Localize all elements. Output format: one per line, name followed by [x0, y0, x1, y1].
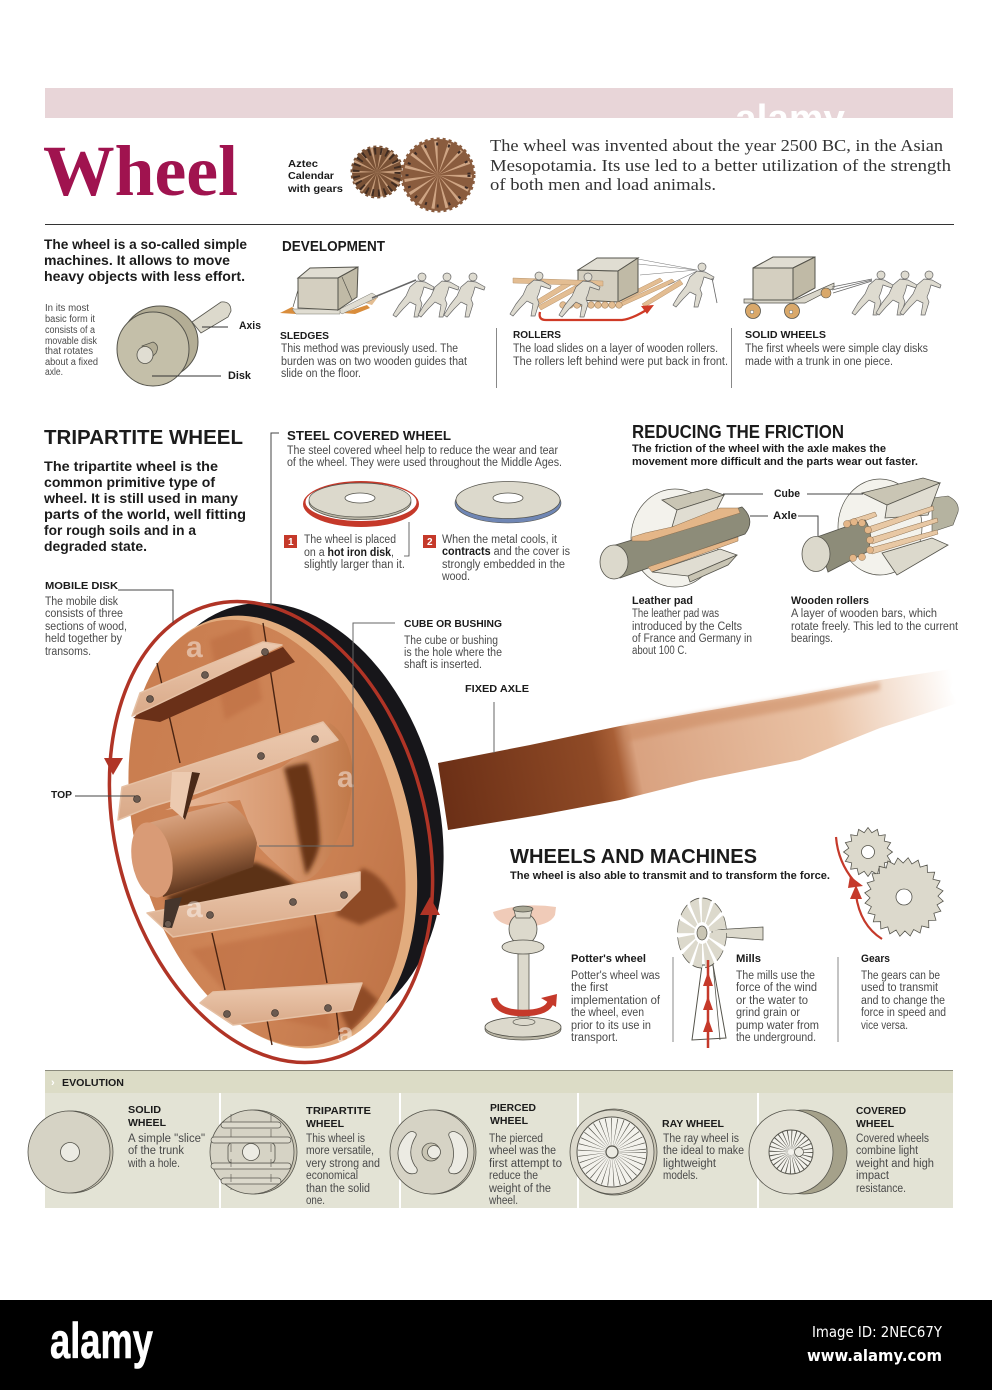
- evolution: tripartite wheel icon: [210, 1110, 297, 1194]
- intro text: Mesopotamia. Its use led to a better utilization of the strength: [490, 156, 952, 175]
- tripartite paragraph: [43, 458, 246, 554]
- text: sledges: SLEDGES: [280, 330, 329, 342]
- text: sledges: [280, 330, 468, 380]
- aztec calendar label: with gears: [287, 183, 343, 195]
- wheel: hub shadow stripe: [284, 763, 320, 875]
- leader: cube or bushing: [259, 623, 395, 846]
- text: gears: used to transmit: [861, 982, 939, 994]
- evolution: tripartite wheel text: WHEEL: [306, 1118, 345, 1130]
- illustration: sledges: [280, 267, 485, 317]
- white separators: [219, 1093, 759, 1208]
- text: wooden rollers: A layer of wooden bars, which: [791, 608, 937, 620]
- text: sledges: This method was previously used. The: [281, 343, 458, 355]
- text: potter's wheel: transport.: [571, 1032, 618, 1044]
- evolution: covered wheel text: [855, 1105, 934, 1195]
- wheel: bevelled edge: [83, 583, 463, 1081]
- evolution: tripartite wheel text: This wheel is: [306, 1133, 365, 1145]
- step 1: [284, 534, 405, 571]
- text: mills: force of the wind: [736, 982, 817, 994]
- text: gears: vice versa.: [861, 1020, 908, 1032]
- text: leather pad: about 100 C.: [632, 645, 687, 657]
- fixed axle label: FIXED AXLE: [465, 683, 529, 695]
- leader: steel covered wheel: [271, 433, 279, 606]
- top label: TOP: [51, 789, 72, 801]
- basic form description: that rotates: [45, 346, 93, 357]
- wheel: axle stub: [148, 802, 257, 897]
- footer bar: alamy: [50, 1313, 153, 1369]
- icon: gears: [836, 828, 947, 940]
- evolution: covered wheel icon: [749, 1110, 847, 1194]
- reducing the friction heading: [632, 422, 918, 468]
- text: potter's wheel: Potter's wheel: [571, 953, 646, 965]
- mobile disk text: consists of three: [45, 608, 123, 620]
- text: potter's wheel: the wheel, even: [571, 1007, 644, 1019]
- text: rollers: The rollers left behind were put back in front.: [513, 356, 728, 368]
- evolution: tripartite wheel text: more versatile,: [306, 1145, 374, 1157]
- diagram: disk and axis: Disk: [228, 370, 252, 382]
- icon: aztec calendar gears: [352, 139, 474, 211]
- text: potter's wheel: prior to its use in: [571, 1020, 651, 1032]
- evolution: ray wheel text: lightweight: [663, 1158, 717, 1170]
- text: wooden rollers: [791, 595, 959, 645]
- top colour band: alamy: [735, 98, 845, 140]
- evolution: ray wheel text: The ray wheel is: [663, 1133, 739, 1145]
- evolution: pierced wheel text: reduce the: [489, 1170, 538, 1182]
- reducing the friction heading: The friction of the wheel with the axle makes the: [632, 443, 886, 455]
- diagram: wooden rollers bearing: [802, 478, 958, 575]
- step 2: strongly embedded in the: [442, 559, 565, 571]
- steel covered wheel heading and text: STEEL COVERED WHEEL: [287, 429, 451, 443]
- wheel: transom shadows: [335, 868, 398, 1032]
- footer bar: [0, 1300, 992, 1390]
- footer bar: www.alamy.com: [807, 1346, 942, 1365]
- steel covered wheel heading and text: The steel covered wheel help to reduce the wear and tear: [287, 445, 558, 457]
- evolution: ray wheel text: models.: [663, 1170, 698, 1182]
- evolution: covered wheel text: impact: [856, 1170, 890, 1182]
- wheel: stub end cap: [126, 819, 178, 901]
- evolution: covered wheel text: combine light: [856, 1145, 919, 1157]
- evolution header strip: ›: [51, 1077, 55, 1089]
- step 2: When the metal cools, it: [442, 534, 558, 546]
- text: potter's wheel: the first: [571, 982, 609, 994]
- step 1: 1: [288, 537, 294, 548]
- wheel: shadow under hub: [165, 862, 296, 908]
- text: rollers: The load slides on a layer of wooden rollers.: [513, 343, 718, 355]
- text: potter's wheel: [571, 953, 661, 1044]
- tripartite paragraph: The tripartite wheel is the: [44, 458, 218, 474]
- icon: potter's wheel: [485, 905, 561, 1040]
- text: sledges: burden was on two wooden guides that: [281, 356, 468, 368]
- evolution: solid wheel text: WHEEL: [128, 1117, 167, 1129]
- top colour band: [45, 88, 953, 118]
- evolution: covered wheel text: Covered wheels: [856, 1133, 929, 1145]
- labels: cube and axle: [723, 488, 863, 536]
- evolution: covered wheel text: COVERED: [856, 1105, 906, 1117]
- text: leather pad: of France and Germany in: [632, 633, 752, 645]
- text: potter's wheel: Potter's wheel was: [571, 970, 660, 982]
- wheel: rotation arrows: [104, 758, 440, 915]
- basic form description: axle.: [45, 367, 63, 378]
- mobile disk text: sections of wood,: [45, 621, 127, 633]
- text: mills: grind grain or: [736, 1007, 800, 1019]
- evolution: ray wheel text: RAY WHEEL: [662, 1118, 725, 1130]
- evolution: pierced wheel text: wheel.: [488, 1195, 518, 1207]
- tripartite paragraph: parts of the world, well fitting: [44, 506, 246, 522]
- text: gears: [861, 953, 946, 1032]
- simple machine statement: machines. It allows to move: [44, 252, 230, 268]
- cube or bushing text: shaft is inserted.: [404, 659, 482, 671]
- wheel: red rotation path: [60, 565, 482, 1099]
- footer bar: Image ID: 2NEC67Y: [812, 1323, 943, 1341]
- text: gears: Gears: [861, 953, 890, 965]
- cube or bushing text: is the hole where the: [404, 647, 502, 659]
- text: mills: the underground.: [736, 1032, 816, 1044]
- tripartite paragraph: wheel. It is still used in many: [43, 490, 238, 506]
- basic form description: about a fixed: [45, 357, 98, 368]
- mobile disk text: held together by: [45, 633, 122, 645]
- cube or bushing text: The cube or bushing: [404, 635, 498, 647]
- heading: tripartite wheel: TRIPARTITE WHEEL: [44, 427, 243, 449]
- mobile disk text: MOBILE DISK: [45, 580, 118, 592]
- evolution: covered wheel text: resistance.: [856, 1183, 906, 1195]
- text: mills: Mills: [736, 953, 761, 965]
- evolution: solid wheel text: SOLID: [128, 1104, 161, 1116]
- labels: cube and axle: Cube: [774, 488, 800, 500]
- illustration: solid wheels: [744, 257, 941, 318]
- evolution: pierced wheel text: first attempt to: [489, 1158, 562, 1170]
- reducing the friction heading: REDUCING THE FRICTION: [632, 422, 844, 442]
- text: solid wheels: [745, 329, 928, 368]
- text: wooden rollers: rotate freely. This led to the current: [791, 621, 959, 633]
- wheels and machines heading: The wheel is also able to transmit and to transform the force.: [510, 870, 830, 882]
- panel: evolution: [28, 1070, 953, 1208]
- evolution: solid wheel icon: [28, 1111, 113, 1193]
- labels: cube and axle: Axle: [773, 510, 797, 522]
- evolution: tripartite wheel text: economical: [306, 1170, 358, 1182]
- tripartite paragraph: for rough soils and in a: [44, 522, 196, 538]
- evolution: pierced wheel icon: [390, 1110, 476, 1194]
- evolution background: [45, 1093, 953, 1208]
- aztec calendar label: Calendar: [288, 170, 334, 182]
- wheel: transom 1: [132, 642, 295, 722]
- evolution: pierced wheel text: WHEEL: [490, 1115, 529, 1127]
- text: mills: [736, 953, 819, 1044]
- evolution: solid wheel text: with a hole.: [127, 1158, 180, 1170]
- wheel: plank cracks: [157, 623, 340, 1045]
- diagram: leather pad bearing: [600, 489, 750, 587]
- evolution: pierced wheel text: The pierced: [489, 1133, 543, 1145]
- reducing the friction heading: movement more difficult and the parts wear out faster.: [632, 456, 918, 468]
- top label: [51, 789, 135, 801]
- fixed axle: [438, 668, 958, 830]
- simple machine statement: heavy objects with less effort.: [44, 268, 245, 284]
- evolution: pierced wheel text: PIERCED: [490, 1102, 536, 1114]
- wheel: brush shading: [190, 625, 330, 1030]
- evolution: pierced wheel text: wheel was the: [488, 1145, 556, 1157]
- step 2: contracts and the cover is: [442, 546, 570, 558]
- steel wheel disk: cooled cover: [455, 482, 561, 523]
- basic form description: [45, 303, 98, 378]
- wheel: lower wedge: [163, 897, 182, 928]
- basic form description: movable disk: [45, 336, 98, 347]
- steel wheel disk: hot ring: [303, 481, 419, 556]
- evolution header strip: EVOLUTION: [62, 1077, 124, 1089]
- evolution header strip: [45, 1070, 953, 1093]
- wheel: wooden face: [84, 589, 450, 1077]
- wheel: transom 4: [200, 983, 362, 1025]
- evolution: ray wheel text: [662, 1118, 744, 1182]
- text: mills: The mills use the: [736, 970, 815, 982]
- icon: windmill: [678, 898, 763, 1048]
- heading: development: DEVELOPMENT: [282, 239, 385, 255]
- text: leather pad: Leather pad: [632, 595, 693, 607]
- wheel: watermark letters: a: [337, 1017, 354, 1050]
- text: solid wheels: The first wheels were simple clay disks: [745, 343, 928, 355]
- intro text: The wheel was invented about the year 2500 BC, in the Asian: [490, 136, 944, 155]
- text: wooden rollers: bearings.: [791, 633, 833, 645]
- evolution: tripartite wheel text: than the solid: [306, 1183, 370, 1195]
- text: solid wheels: made with a trunk in one piece.: [745, 356, 893, 368]
- step 1: slightly larger than it.: [304, 559, 405, 571]
- title: Wheel: [43, 131, 238, 211]
- text: sledges: slide on the floor.: [281, 368, 361, 380]
- evolution: ray wheel text: the ideal to make: [663, 1145, 744, 1157]
- cube or bushing text: [404, 618, 502, 671]
- mobile disk text: [45, 580, 127, 658]
- text: wooden rollers: Wooden rollers: [791, 595, 869, 607]
- steel covered wheel heading and text: of the wheel. They were used throughout the Middle Ages.: [287, 457, 562, 469]
- fixed axle label: [465, 683, 529, 753]
- evolution: solid wheel text: A simple "slice": [128, 1133, 205, 1145]
- steel covered wheel heading and text: [287, 429, 562, 469]
- evolution: tripartite wheel text: one.: [306, 1195, 325, 1207]
- text: leather pad: introduced by the Celts: [632, 621, 742, 633]
- evolution: tripartite wheel text: very strong and: [306, 1158, 380, 1170]
- simple machine statement: [44, 236, 247, 284]
- text: rollers: [513, 329, 728, 368]
- wheels and machines heading: [510, 846, 830, 882]
- wheel: wedge: [170, 772, 200, 820]
- wheel: iron rim: [93, 568, 489, 1062]
- aztec calendar label: Aztec: [288, 158, 318, 170]
- tripartite paragraph: degraded state.: [44, 538, 147, 554]
- evolution: tripartite wheel text: [306, 1105, 380, 1207]
- wheel: hub block: [165, 723, 353, 881]
- evolution: ray wheel icon: [570, 1109, 657, 1195]
- step 2: [423, 534, 570, 583]
- step 1: The wheel is placed: [304, 534, 396, 546]
- diagram: disk and axis: [117, 302, 261, 386]
- wheel: transom 2: [118, 722, 338, 820]
- evolution: covered wheel text: WHEEL: [856, 1118, 895, 1130]
- step 2: 2: [427, 537, 433, 548]
- basic form description: In its most: [45, 303, 89, 314]
- text: leather pad: [632, 595, 752, 657]
- wheels and machines heading: WHEELS AND MACHINES: [510, 846, 757, 868]
- text: gears: The gears can be: [861, 970, 940, 982]
- evolution: solid wheel text: of the trunk: [128, 1145, 184, 1157]
- mobile disk text: transoms.: [45, 646, 91, 658]
- intro text: [490, 136, 952, 194]
- aztec calendar label: [287, 158, 343, 195]
- basic form description: consists of a: [45, 325, 95, 336]
- text: gears: force in speed and: [861, 1007, 946, 1019]
- step 1: on a hot iron disk,: [304, 547, 394, 559]
- wheel: transom 3: [147, 872, 360, 937]
- mobile disk text: The mobile disk: [45, 596, 118, 608]
- evolution: solid wheel text: [127, 1104, 205, 1170]
- text: rollers: ROLLERS: [513, 329, 561, 341]
- illustration: rollers: [510, 258, 717, 320]
- wheel: watermark letters: a: [337, 761, 354, 794]
- evolution: pierced wheel text: [488, 1102, 562, 1207]
- tripartite paragraph: common primitive type of: [44, 474, 215, 490]
- text: mills: pump water from: [736, 1020, 819, 1032]
- step 2: wood.: [441, 571, 470, 583]
- wheel: watermark letters: a: [186, 631, 203, 664]
- main wheel illustration: [60, 565, 489, 1099]
- simple machine statement: The wheel is a so-called simple: [44, 236, 247, 252]
- text: mills: or the water to: [736, 995, 808, 1007]
- intro text: of both men and load animals.: [490, 175, 716, 194]
- diagram: disk and axis: Axis: [239, 320, 261, 332]
- cube or bushing text: CUBE OR BUSHING: [404, 618, 502, 630]
- text: potter's wheel: implementation of: [571, 995, 661, 1007]
- leader: mobile disk: [118, 590, 173, 623]
- wheel: watermark letters: [186, 631, 354, 1050]
- evolution: covered wheel text: weight and high: [855, 1158, 934, 1170]
- text: solid wheels: SOLID WHEELS: [745, 329, 826, 341]
- wheel: nails: [134, 648, 348, 1018]
- evolution: tripartite wheel text: TRIPARTITE: [306, 1105, 371, 1117]
- evolution: pierced wheel text: weight of the: [488, 1183, 551, 1195]
- text: gears: and to change the: [861, 995, 945, 1007]
- wheel: watermark letters: a: [186, 891, 203, 924]
- text: leather pad: The leather pad was: [632, 608, 719, 620]
- basic form description: basic form it: [45, 314, 95, 325]
